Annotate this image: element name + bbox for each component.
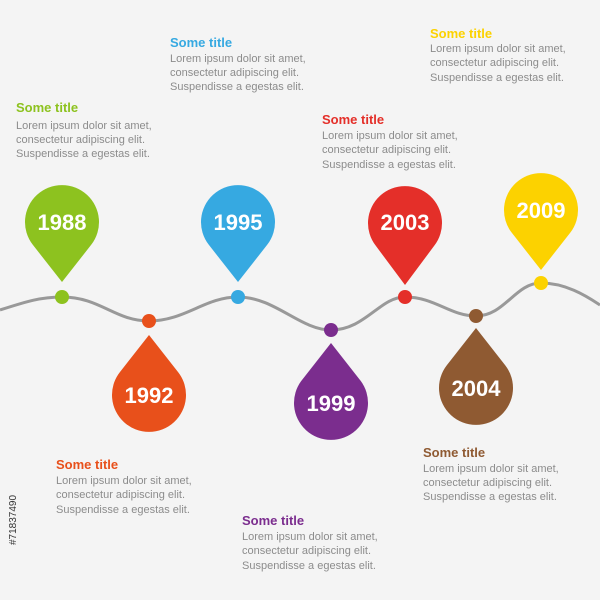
marker: 1992 xyxy=(112,314,186,432)
text: 1995: Some title xyxy=(170,35,232,50)
marker: 2003 xyxy=(368,186,442,304)
text: 1988: Lorem ipsum dolor sit amet, xyxy=(16,120,152,132)
text: 1992: Some title xyxy=(56,457,118,472)
stock id: #71837490 xyxy=(8,495,19,545)
text: 2004: consectetur adipiscing elit. xyxy=(423,477,552,489)
text: 2009 xyxy=(430,26,566,84)
marker: 1992: 1992 xyxy=(125,383,173,408)
text: 2003: Suspendisse a egestas elit. xyxy=(322,159,456,171)
marker: 1988 xyxy=(25,185,99,304)
text: 2003 xyxy=(322,112,458,171)
text: 2009: Suspendisse a egestas elit. xyxy=(430,72,564,84)
text: 2003: Lorem ipsum dolor sit amet, xyxy=(322,130,458,142)
marker: 2004: 2004 xyxy=(452,376,501,401)
text: 2003: Some title xyxy=(322,112,384,127)
marker: 2003: 2003 xyxy=(381,210,429,235)
text: 1995 xyxy=(170,35,306,93)
marker: 1995 xyxy=(201,185,275,304)
marker: 2004 xyxy=(439,309,513,425)
text: 2004: Some title xyxy=(423,445,485,460)
marker: 2009: 2009 xyxy=(517,198,565,223)
text: 1995: Suspendisse a egestas elit. xyxy=(170,81,304,93)
text: 1995: Lorem ipsum dolor sit amet, xyxy=(170,53,306,65)
text: 2004: Suspendisse a egestas elit. xyxy=(423,491,557,503)
text: 1995: consectetur adipiscing elit. xyxy=(170,67,299,79)
text: 1988: Some title xyxy=(16,100,78,115)
text: 2009: Some title xyxy=(430,26,492,41)
marker: 1999 xyxy=(294,323,368,440)
marker: 1995: 1995 xyxy=(214,210,262,235)
marker: 1999: 1999 xyxy=(307,391,355,416)
text: 2009: consectetur adipiscing elit. xyxy=(430,57,559,69)
text: 1992: Suspendisse a egestas elit. xyxy=(56,504,190,516)
text: 1988 xyxy=(16,100,152,160)
text: 1999: Some title xyxy=(242,513,304,528)
text: 1992: Lorem ipsum dolor sit amet, xyxy=(56,475,192,487)
text: 1992: consectetur adipiscing elit. xyxy=(56,489,185,501)
text: 2009: Lorem ipsum dolor sit amet, xyxy=(430,43,566,55)
text: 1999 xyxy=(242,513,378,572)
text: 2003: consectetur adipiscing elit. xyxy=(322,144,451,156)
text: 1992 xyxy=(56,457,192,516)
text: 1988: Suspendisse a egestas elit. xyxy=(16,148,150,160)
text: 2004 xyxy=(423,445,559,503)
text: 1999: Lorem ipsum dolor sit amet, xyxy=(242,531,378,543)
text: 1999: consectetur adipiscing elit. xyxy=(242,545,371,557)
marker: 2009 xyxy=(504,173,578,290)
timeline curve xyxy=(0,283,600,330)
text: 2004: Lorem ipsum dolor sit amet, xyxy=(423,463,559,475)
marker: 1988: 1988 xyxy=(38,210,86,235)
text: 1988: consectetur adipiscing elit. xyxy=(16,134,145,146)
text: 1999: Suspendisse a egestas elit. xyxy=(242,560,376,572)
